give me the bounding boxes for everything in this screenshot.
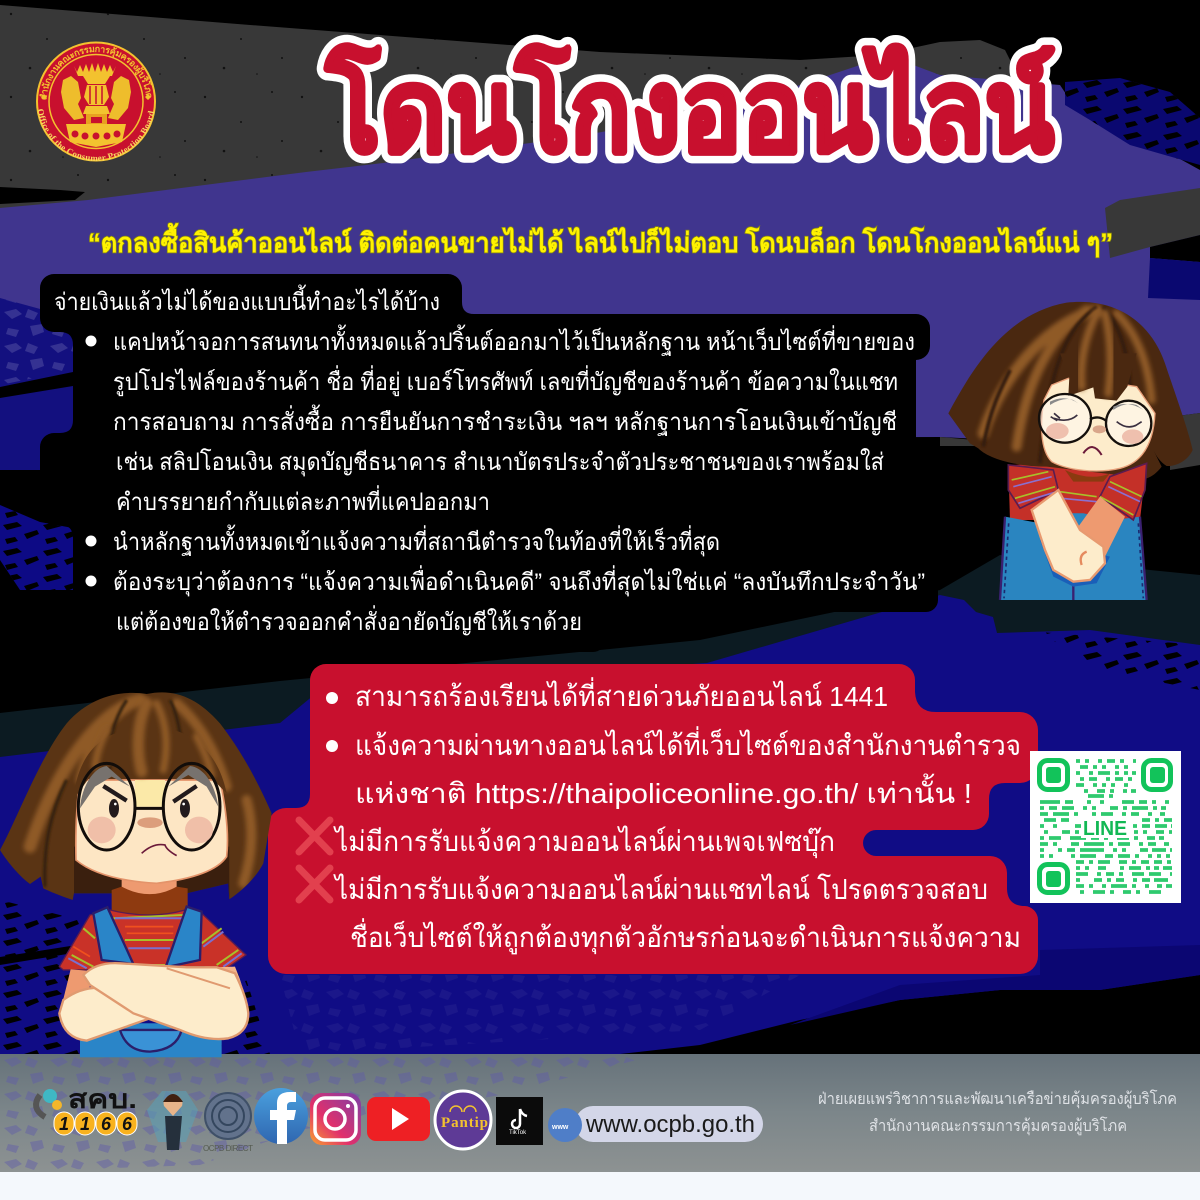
footer icon: OCPB direct: OCPB DIRECT — [203, 1144, 253, 1153]
bullets — [326, 692, 338, 752]
icon: cross — [299, 868, 330, 900]
footer bar — [0, 1054, 1200, 1200]
icon: facebook — [254, 1088, 308, 1144]
title: โดนโกงออนไลน์ — [325, 44, 1054, 176]
seal logo: Office of the Consumer Protection Board — [38, 109, 154, 162]
icon: tiktok — [496, 1097, 543, 1145]
panel: what to do — [40, 274, 938, 652]
footer logo: 1166 hotline: สคบ. — [68, 1084, 137, 1114]
website pill: www.ocpb.go.th — [585, 1111, 755, 1138]
bullet list: แคปหน้าจอการสนทนาทั้งหมดแล้วปริ้นต์ออกมาไว้เป็นหลักฐาน หน้าเว็บไซต์ที่ขายของ — [113, 324, 915, 356]
icon: tiktok: TikTok — [509, 1130, 527, 1136]
bullet list: แต่ต้องขอให้ตำรวจออกคำสั่งอายัดบัญชีให้เราด้วย — [116, 605, 582, 636]
warning: line: ไม่มีการรับแจ้งความออนไลน์ผ่านแชทไลน์ โปรดตรวจสอบ — [333, 873, 988, 905]
footer credit: สำนักงานคณะกรรมการคุ้มครองผู้บริโภค — [869, 1116, 1127, 1136]
icon: pantip — [435, 1091, 491, 1149]
footer logo: 1166 hotline — [36, 1084, 137, 1135]
bullet list: เช่น สลิปโอนเงิน สมุดบัญชีธนาคาร สำเนาบัตรประจำตัวประชาชนของเราพร้อมใส่ — [116, 448, 884, 477]
panel: how to report — [268, 664, 1038, 974]
bullet list: นำหลักฐานทั้งหมดเข้าแจ้งความที่สถานีตำรวจในท้องที่ให้เร็วที่สุด — [113, 524, 720, 557]
bullet list: การสอบถาม การสั่งซื้อ การยืนยันการชำระเงิน ฯลฯ หลักฐานการโอนเงินเข้าบัญชี — [113, 404, 897, 436]
seal logo: สำนักงานคณะกรรมการคุ้มครองผู้บริโภค — [39, 46, 152, 100]
quote subtitle: “ตกลงซื้อสินค้าออนไลน์ ติดต่อคนขายไม่ได้ ไลน์ไปก็ไม่ตอบ โดนบล็อก โดนโกงออนไลน์แน่ ๆ” — [88, 222, 1113, 258]
icon: cross — [299, 820, 330, 852]
footer credit: ฝ่ายเผยแพร่วิชาการและพัฒนาเครือข่ายคุ้มครองผู้บริโภค — [818, 1089, 1177, 1109]
footer logo: 1166 hotline: 1 — [59, 1114, 69, 1134]
website pill: www — [551, 1124, 569, 1131]
website text: แจ้งความผ่านทางออนไลน์ได้ที่เว็บไซต์ของสำนักงานตำรวจ — [355, 726, 1021, 761]
footer logo: 1166 hotline: 6 — [101, 1114, 112, 1134]
character: angry girl — [0, 692, 272, 1057]
seal logo — [36, 42, 156, 162]
panel background — [40, 274, 938, 652]
title: โดนโกงออนไลน์ — [325, 44, 1054, 176]
bullet list: ต้องระบุว่าต้องการ “แจ้งความเพื่อดำเนินคดี” จนถึงที่สุดไม่ใช่แค่ “ลงบันทึกประจำวัน” — [113, 565, 925, 597]
website pill — [548, 1106, 763, 1142]
QR code — [1030, 751, 1181, 903]
warning: facebook: ไม่มีการรับแจ้งความออนไลน์ผ่านเพจเฟซบุ๊ก — [333, 826, 835, 859]
QR code: LINE — [1083, 818, 1127, 840]
footer logo: 1166 hotline: 6 — [122, 1114, 133, 1134]
website text — [355, 726, 1021, 809]
icon: youtube — [367, 1097, 430, 1141]
footer icon: officer — [147, 1091, 198, 1150]
icon: pantip: Pantip — [441, 1115, 488, 1131]
bullet list: รูปโปรไฟล์ของร้านค้า ชื่อ ที่อยู่ เบอร์โทรศัพท์ เลขที่บัญชีของร้านค้า ข้อความในแชท — [113, 365, 898, 397]
footer icon: OCPB direct — [203, 1093, 253, 1153]
panel background — [268, 664, 1038, 974]
icon: instagram — [310, 1093, 361, 1145]
bullet list: คำบรรยายกำกับแต่ละภาพที่แคปออกมา — [116, 485, 490, 516]
hotline text: สามารถร้องเรียนได้ที่สายด่วนภัยออนไลน์ 1441 — [355, 677, 888, 712]
footer credit — [818, 1089, 1177, 1136]
warning: line: ชื่อเว็บไซต์ให้ถูกต้องทุกตัวอักษรก่อนจะดำเนินการแจ้งความ — [350, 918, 1021, 955]
website text: แห่งชาติ https://thaipoliceonline.go.th/ เท่านั้น ! — [355, 773, 972, 809]
bullet list — [86, 324, 925, 636]
footer logo: 1166 hotline: 1 — [80, 1114, 90, 1134]
warning: line — [333, 873, 1021, 955]
heading: จ่ายเงินแล้วไม่ได้ของแบบนี้ทำอะไรได้บ้าง — [54, 284, 440, 316]
character: sad girl — [948, 302, 1193, 600]
